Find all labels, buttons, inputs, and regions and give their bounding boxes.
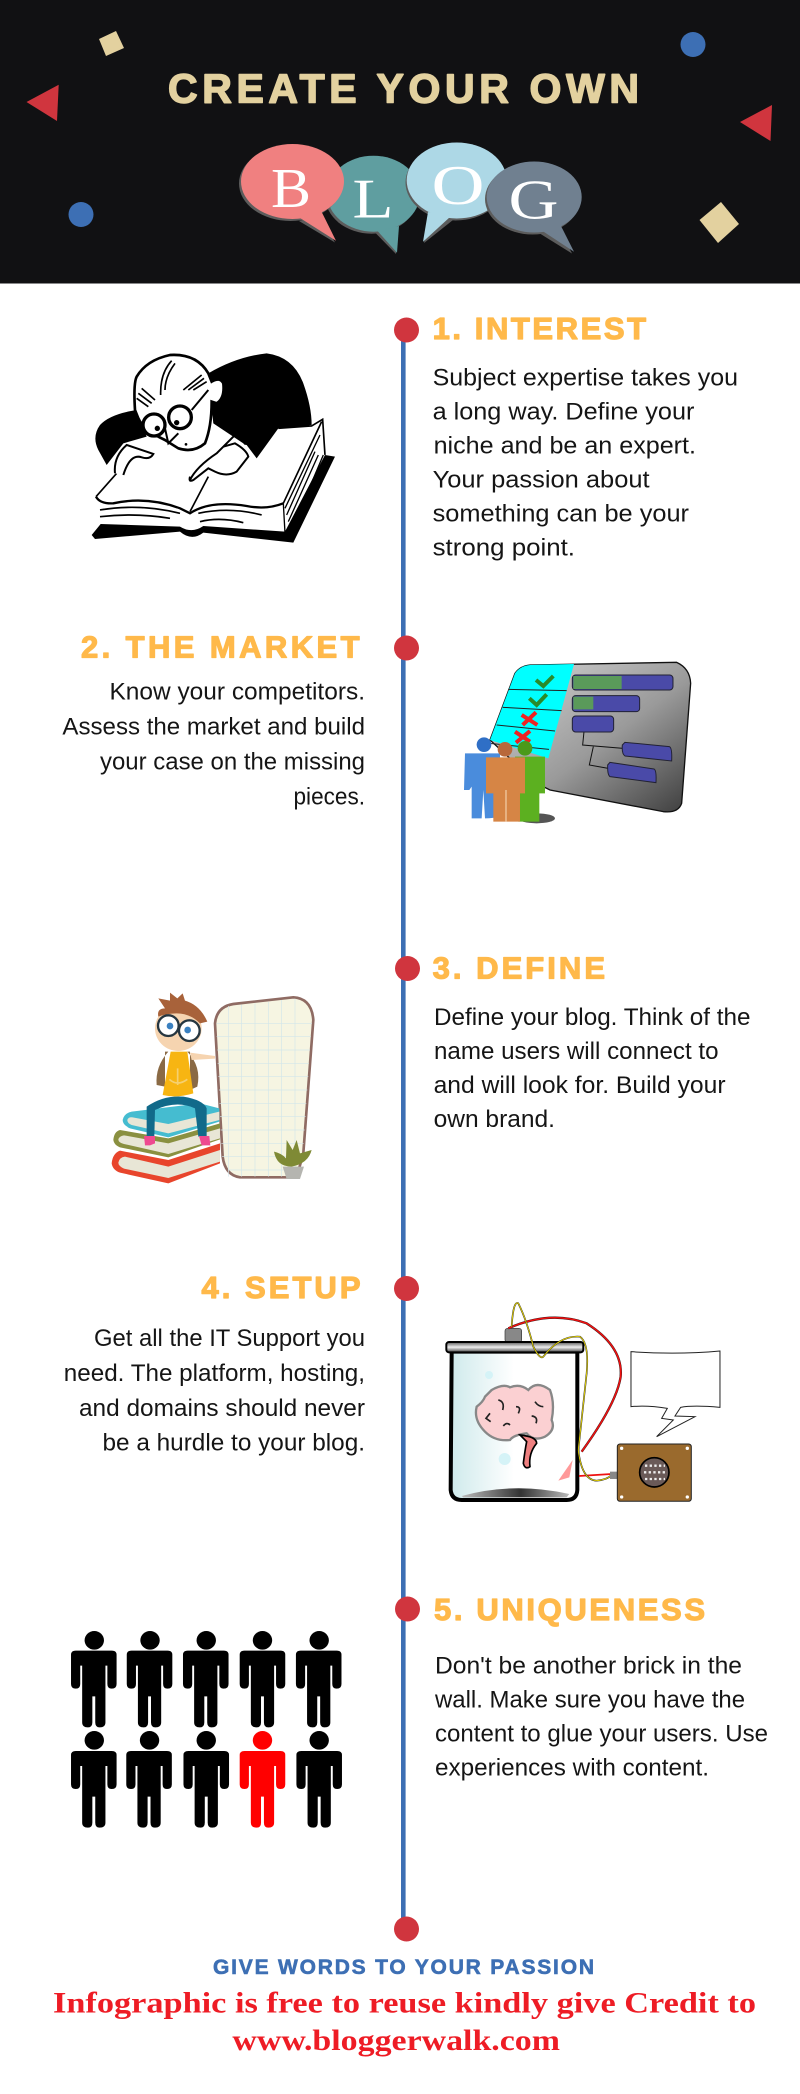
text block: step 1: Subject expertise takes you <box>433 365 738 392</box>
heading: 3. Define: 3. DEFINE <box>433 950 605 986</box>
header banner <box>0 0 800 284</box>
decorative confetti shapes <box>26 31 772 243</box>
text block: step 5: experiences with content. <box>435 1754 709 1781</box>
text block: step 4: need. The platform, hosting, <box>64 1360 365 1387</box>
text block: step 2: Assess the market and build <box>62 713 365 740</box>
bubble B: B <box>271 158 311 220</box>
text block: step 1: Your passion about <box>433 467 650 494</box>
bubble G: G <box>508 170 558 232</box>
text block: step 1: something can be your <box>433 501 689 528</box>
icon: gantt chart with team <box>464 662 691 823</box>
credit line: www.bloggerwalk.com <box>232 2024 560 2057</box>
text block: step 3: Define your blog. Think of the <box>434 1004 750 1031</box>
bubble L <box>325 156 420 254</box>
BLOG speech bubbles <box>239 142 582 254</box>
text block: step 4 <box>64 1325 365 1457</box>
bubble O <box>406 142 507 243</box>
bubble O: O <box>432 155 484 217</box>
panel: step 4 setup <box>64 1270 720 1501</box>
bubble G <box>485 162 582 254</box>
text block: step 4: be a hurdle to your blog. <box>102 1430 365 1457</box>
timeline line and dots <box>394 318 420 1942</box>
heading: 2. The Market: 2. THE MARKET <box>81 630 360 665</box>
text block: step 5: content to glue your users. Use <box>435 1720 768 1747</box>
panel: step 5 uniqueness <box>71 1592 768 1828</box>
text block: step 4: Get all the IT Support you <box>94 1325 365 1352</box>
footer tagline: GIVE WORDS TO YOUR PASSION <box>213 1956 594 1979</box>
text block: step 5: Don't be another brick in the <box>435 1652 742 1679</box>
text block: step 4: and domains should never <box>79 1395 365 1422</box>
bubble L: L <box>352 169 394 231</box>
text block: step 2: your case on the missing <box>100 748 365 775</box>
text block: step 5: wall. Make sure you have the <box>434 1686 745 1713</box>
icon: row of people with one red <box>71 1631 342 1828</box>
text block: step 1: strong point. <box>433 535 575 562</box>
title: CREATE YOUR OWN <box>168 66 639 112</box>
text block: step 2 <box>62 678 365 810</box>
heading: 1. Interest: 1. INTEREST <box>433 311 646 346</box>
credit line <box>53 1987 756 2057</box>
icon: brain in a jar with speaker <box>446 1303 720 1501</box>
panel: step 3 define <box>112 950 750 1183</box>
text block: step 3 <box>434 1004 750 1133</box>
icon: boy on books with notepad <box>112 993 313 1183</box>
text block: step 5 <box>434 1652 768 1781</box>
icon: man reading a book <box>92 353 335 543</box>
bubble B <box>239 144 344 242</box>
text block: step 2: Know your competitors. <box>110 678 365 705</box>
text block: step 3: own brand. <box>434 1106 555 1133</box>
text block: step 2: pieces. <box>294 783 365 810</box>
text block: step 1: a long way. Define your <box>433 399 694 426</box>
panel: step 1 interest <box>92 311 738 562</box>
text block: step 3: name users will connect to <box>434 1038 718 1065</box>
text block: step 1 <box>433 365 738 562</box>
text block: step 1: niche and be an expert. <box>434 433 696 460</box>
heading: 4. Setup: 4. SETUP <box>202 1270 360 1305</box>
panel: step 2 the market <box>62 630 691 823</box>
heading: 5. Uniqueness: 5. UNIQUENESS <box>434 1592 705 1627</box>
credit line: Infographic is free to reuse kindly give Credit to <box>53 1987 756 2020</box>
text block: step 3: and will look for. Build your <box>434 1072 726 1099</box>
